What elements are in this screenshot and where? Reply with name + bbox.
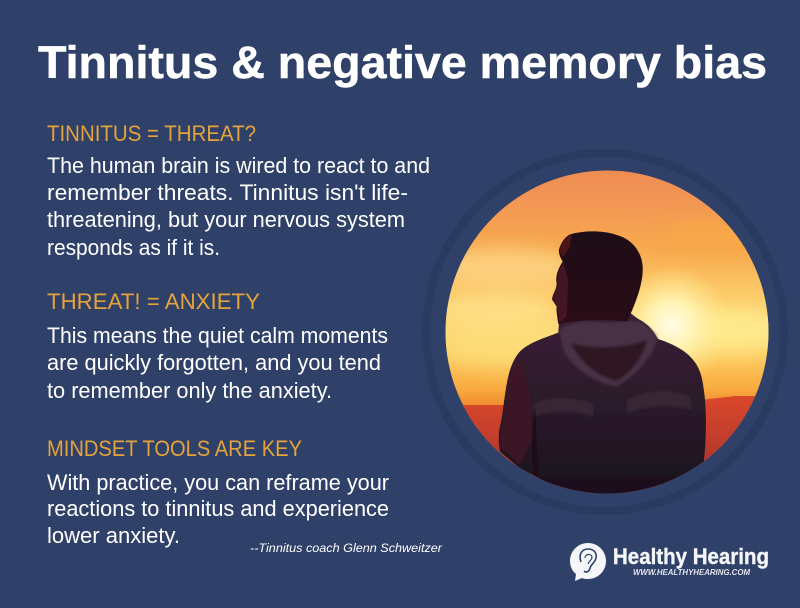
section: tinnitus equals threat [47,121,430,260]
text block: reframe reactions: reactions to tinnitus and experience [47,496,389,521]
text block: calm moments: This means the quiet calm moments [47,323,388,348]
heading: threat anxiety: THREAT! = ANXIETY [47,289,260,314]
hair tint [559,234,572,257]
text block: calm moments: are quickly forgotten, and you tend [47,350,381,375]
text block: brain wired: responds as if it is. [47,235,220,260]
title: Tinnitus & negative memory bias [38,37,767,88]
section: mindset tools [47,436,389,548]
heading: tinnitus threat: TINNITUS = THREAT? [47,121,256,146]
text block: calm moments [47,323,388,403]
text block: calm moments: to remember only the anxiety. [47,378,332,403]
decorative ring around photo [426,153,784,511]
face tint [553,263,568,323]
text block: reframe reactions [47,470,389,548]
neck and head [552,231,643,324]
sleeve seam shade [532,407,539,478]
text block: brain wired: The human brain is wired to react to and [47,153,430,178]
photo: man silhouetted at sunset [446,170,768,494]
text block: reframe reactions: With practice, you can reframe your [47,470,389,495]
text block: brain wired [47,153,430,260]
section: threat equals anxiety [47,289,388,403]
hood [559,321,657,387]
logo url: WWW.HEALTHYHEARING.COM [633,568,750,577]
heading: mindset tools: MINDSET TOOLS ARE KEY [47,436,302,461]
hooded torso [499,312,706,507]
man silhouette [499,231,706,507]
shoulder highlights [533,398,593,417]
text block: reframe reactions: lower anxiety. [47,523,180,548]
icon: ear in speech bubble [570,543,606,581]
text block: brain wired: remember threats. Tinnitus isn't life- [47,180,408,205]
text block: brain wired: threatening, but your nervous system [47,207,405,232]
attribution: --Tinnitus coach Glenn Schweitzer [250,541,443,555]
logo: Healthy Hearing [570,543,769,581]
sleeve red tint [500,357,532,465]
logo wordmark: Healthy Hearing [613,544,769,569]
horizon and ground [463,396,756,494]
